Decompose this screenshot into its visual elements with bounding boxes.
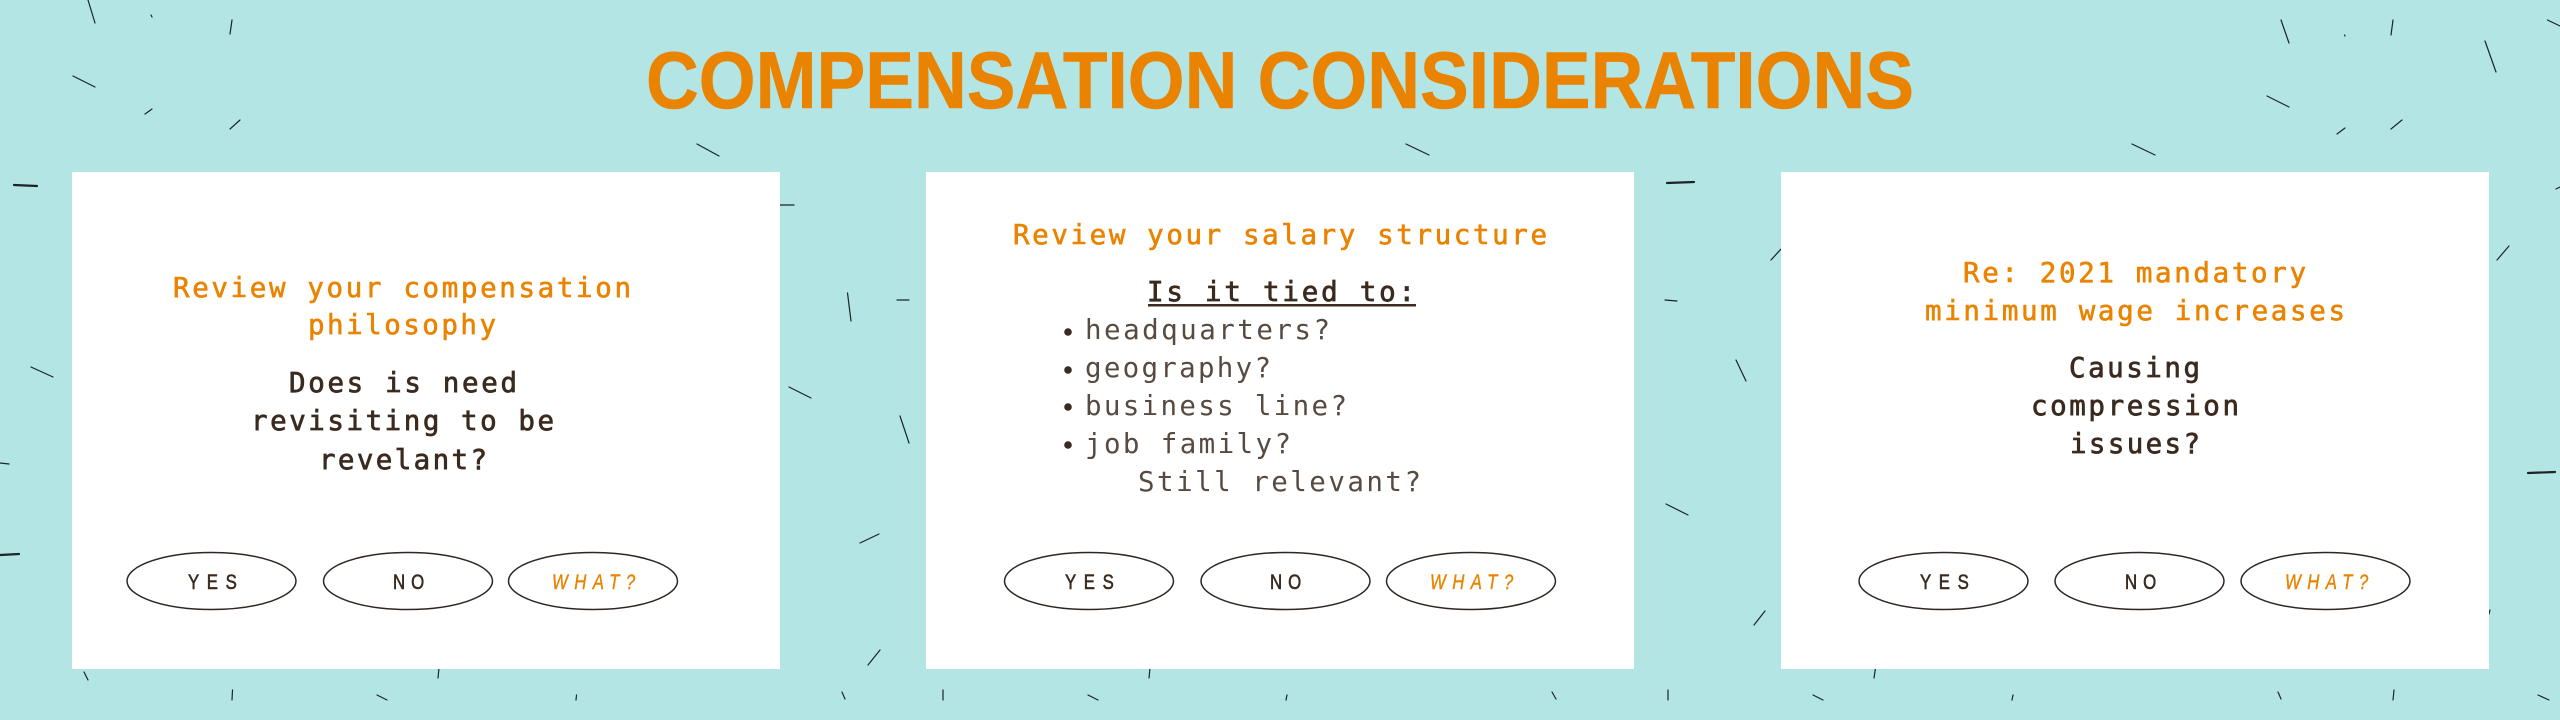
answer options: YES (1920, 571, 1969, 595)
bullet list: business line? (1085, 390, 1347, 422)
card heading: minimum wage increases (1925, 295, 2345, 327)
title: COMPENSATION CONSIDERATIONS (646, 36, 1914, 126)
card heading (173, 272, 631, 341)
card question (2031, 352, 2239, 460)
card background (926, 172, 1634, 669)
answer options: WHAT? (552, 571, 636, 595)
answer options: WHAT? (2285, 571, 2369, 595)
card heading: Re: 2021 mandatory (1963, 257, 2306, 289)
panel: compensation philosophy (72, 172, 780, 669)
answer options: NO (393, 571, 424, 595)
answer options: YES (1065, 571, 1114, 595)
card heading: Review your compensation (173, 272, 631, 304)
answer options: WHAT? (1430, 571, 1514, 595)
closing question: Still relevant? (1138, 466, 1421, 498)
card question: revelant? (319, 444, 487, 476)
card background (1781, 172, 2489, 669)
card question: Causing (2069, 352, 2200, 384)
card heading (1925, 257, 2345, 327)
panel: salary structure (926, 172, 1634, 669)
panel: minimum wage increases (1781, 172, 2489, 669)
list heading: Is it tied to: (1147, 276, 1415, 308)
bullet list (1064, 314, 1347, 460)
bullet list: headquarters? (1085, 314, 1330, 346)
card question (251, 367, 554, 476)
answer options: NO (1270, 571, 1301, 595)
card question: compression (2031, 390, 2239, 422)
bullet list: geography? (1085, 352, 1271, 384)
answer options (127, 552, 678, 610)
answer options: NO (2125, 571, 2156, 595)
card question: issues? (2070, 428, 2200, 460)
answer options (1004, 552, 1556, 610)
card question: revisiting to be (251, 405, 554, 437)
answer options (1859, 552, 2410, 610)
card heading: Review your salary structure (1013, 219, 1547, 251)
card background (72, 172, 780, 669)
bullet list: job family? (1085, 428, 1291, 460)
answer options: YES (188, 571, 237, 595)
card question: Does is need (289, 367, 517, 399)
card heading: philosophy (308, 309, 496, 341)
